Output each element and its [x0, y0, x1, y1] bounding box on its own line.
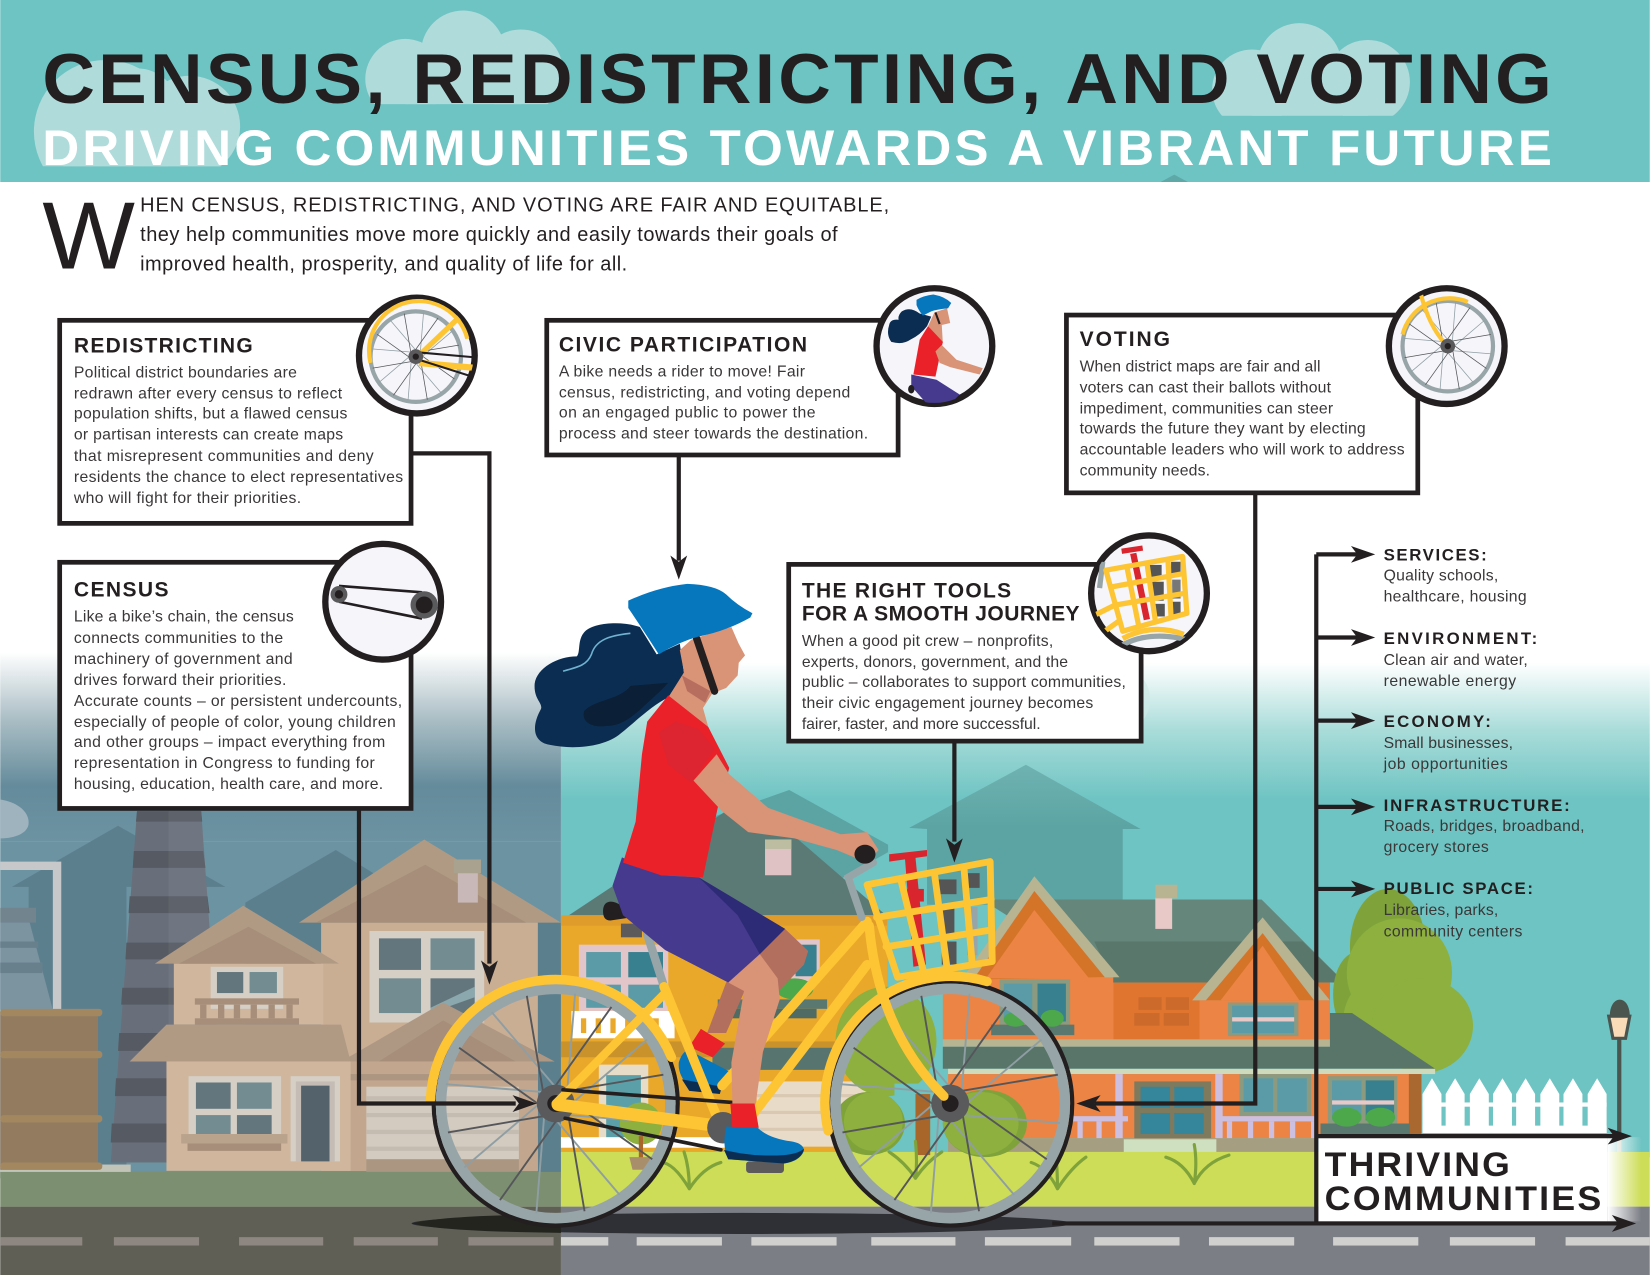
panel: census: machinery of government and	[74, 651, 293, 668]
civic participation connector arrow	[670, 457, 687, 580]
smokestack	[111, 811, 227, 1162]
outcome: public space: PUBLIC SPACE:	[1384, 879, 1533, 898]
panel: the right tools: experts, donors, government, and the	[802, 654, 1068, 671]
hair	[535, 623, 684, 747]
redistricting connector arrow	[412, 453, 498, 985]
outcome: public space: community centers	[1384, 923, 1523, 940]
face and neck	[668, 627, 745, 727]
saddle	[603, 902, 642, 937]
right tools connector arrow	[946, 743, 963, 863]
panel: voting: towards the future they want by electing	[1080, 420, 1366, 437]
intro paragraph with drop cap: improved health, prosperity, and quality of life for all.	[140, 253, 627, 275]
outcome: infrastructure: grocery stores	[1384, 839, 1489, 856]
tan house small	[130, 906, 351, 1171]
panel: redistricting: residents the chance to elect representatives	[74, 469, 403, 486]
panel: census: Like a bike’s chain, the census	[74, 609, 294, 626]
shirt	[623, 695, 729, 877]
thriving communities label box	[1318, 1137, 1641, 1221]
front wheel	[828, 981, 1072, 1226]
outcome: services: SERVICES:	[1384, 546, 1487, 565]
icon: rider	[877, 288, 992, 404]
lawn	[561, 1152, 1650, 1207]
ground left	[0, 1172, 561, 1207]
panel: civic participation: A bike needs a rider to move! Fair	[559, 364, 805, 381]
panel: civic participation: on an engaged public to power the	[559, 405, 816, 422]
helmet strap	[697, 639, 715, 691]
tree right	[1333, 889, 1473, 1073]
panel: the right tools: THE RIGHT TOOLS	[802, 580, 1011, 603]
title: CENSUS, REDISTRICTING, AND VOTING	[42, 39, 1555, 118]
outcome: services: Quality schools,	[1384, 568, 1498, 585]
intro paragraph with drop cap: W	[42, 182, 136, 289]
orange house	[943, 876, 1345, 1047]
panel: voting	[1066, 288, 1505, 493]
panel: redistricting	[60, 298, 479, 523]
subtitle: DRIVING COMMUNITIES TOWARDS A VIBRANT FUTURE	[42, 119, 1555, 176]
panel: voting: community needs.	[1080, 462, 1210, 479]
intro paragraph with drop cap	[42, 182, 889, 289]
panel: census	[60, 544, 441, 808]
basket with tools	[867, 850, 992, 977]
near leg and shoe	[724, 954, 804, 1163]
outcome: services: healthcare, housing	[1384, 589, 1527, 606]
arm	[694, 754, 879, 863]
road right	[561, 1207, 1650, 1275]
cloud left	[0, 800, 29, 838]
panel: the right tools: fairer, faster, and more successful.	[802, 716, 1041, 733]
panel: redistricting: redrawn after every census to reflect	[74, 386, 343, 403]
road left	[0, 1207, 561, 1275]
scene: unfair community (left)	[0, 652, 561, 1275]
panel: civic participation: process and steer towards the destination.	[559, 426, 868, 443]
panel: redistricting: that misrepresent communities and deny	[74, 448, 374, 465]
picket fence	[1423, 1078, 1607, 1133]
panel: voting: When district maps are fair and all	[1080, 358, 1320, 375]
panel: the right tools: their civic engagement journey becomes	[802, 695, 1093, 712]
grass tufts	[661, 1141, 1229, 1189]
panel: the right tools	[789, 535, 1207, 741]
panel: voting: voters can cast their ballots without	[1080, 379, 1332, 396]
panel: civic participation: census, redistricting, and voting depend	[559, 385, 850, 402]
panel: redistricting: Political district boundaries are	[74, 365, 297, 382]
thriving communities label box: THRIVING	[1325, 1146, 1512, 1184]
intro paragraph with drop cap: they help communities move more quickly and easily towards their goals of	[140, 224, 838, 246]
panel: civic participation	[547, 288, 992, 455]
far leg and far shoe	[679, 929, 808, 1094]
panel: census: representation in Congress to funding for	[74, 755, 375, 772]
orange house porch level	[943, 1013, 1435, 1155]
icon: rear wheel	[359, 298, 479, 413]
panel: census: housing, education, health care, and more.	[74, 776, 383, 793]
panel: the right tools: public – collaborates to support communities,	[802, 674, 1126, 691]
icon: chain	[325, 544, 441, 660]
illustration: rider and yellow bicycle	[431, 584, 1072, 1226]
panel: census: connects communities to the	[74, 630, 283, 647]
panel: voting: accountable leaders who will work to address	[1080, 441, 1405, 458]
panel: census: and other groups – impact everything from	[74, 734, 385, 751]
panel: redistricting: who will fight for their priorities.	[73, 490, 301, 507]
panel: civic participation: CIVIC PARTICIPATION	[559, 333, 807, 356]
census connector arrow	[359, 810, 537, 1112]
panel: redistricting: population shifts, but a flawed census	[74, 406, 348, 423]
street lamp	[1603, 1000, 1636, 1174]
tan house large	[299, 839, 561, 1172]
voting connector arrow	[1076, 494, 1255, 1112]
panel: the right tools: FOR A SMOOTH JOURNEY	[802, 603, 1080, 626]
outcome: services	[1316, 546, 1527, 606]
icon: tool basket	[1091, 535, 1207, 651]
faint clouds right	[1112, 673, 1150, 726]
ground shadow under bike	[412, 1213, 1072, 1234]
outcome: economy	[1316, 712, 1513, 773]
helmet	[628, 584, 752, 654]
icon: front wheel	[1389, 288, 1505, 404]
outcome: environment: renewable energy	[1384, 673, 1516, 690]
crank and pedal	[707, 1112, 784, 1173]
shorts	[612, 857, 785, 983]
panel: voting: VOTING	[1080, 328, 1170, 351]
silhouettes left	[12, 826, 561, 1178]
outcome: environment: Clean air and water,	[1384, 652, 1528, 669]
outcome: environment: ENVIRONMENT:	[1384, 629, 1537, 648]
outcome: public space: Libraries, parks,	[1384, 902, 1498, 919]
panel: redistricting: REDISTRICTING	[74, 334, 253, 357]
bike frame	[431, 863, 987, 1150]
outcome: environment	[1316, 629, 1537, 690]
panel: census: Accurate counts – or persistent undercounts,	[74, 693, 402, 710]
header banner	[0, 0, 1650, 182]
outcome: infrastructure	[1316, 796, 1585, 856]
outcome: economy: ECONOMY:	[1384, 712, 1491, 731]
silhouette houses right	[715, 765, 1141, 905]
outcome: infrastructure: INFRASTRUCTURE:	[1384, 796, 1570, 815]
panel: redistricting: or partisan interests can create maps	[74, 427, 343, 444]
outcome: economy: job opportunities	[1383, 756, 1508, 773]
factory pipe and tanks	[0, 866, 131, 1178]
yellow house	[561, 796, 887, 1152]
outcome: economy: Small businesses,	[1384, 735, 1513, 752]
outcome: public space	[1316, 879, 1533, 940]
panel: census: CENSUS	[74, 578, 169, 601]
thriving communities label box: COMMUNITIES	[1325, 1180, 1603, 1218]
panel: census: especially of people of color, young children	[74, 714, 396, 731]
thriving communities arrows	[1052, 554, 1636, 1232]
outcome: infrastructure: Roads, bridges, broadband,	[1384, 818, 1585, 835]
panel: census: drives forward their priorities.	[74, 672, 286, 689]
panel: voting: impediment, communities can steer	[1080, 400, 1333, 417]
bushes and small trees behind bike	[620, 987, 1027, 1170]
panel: the right tools: When a good pit crew – nonprofits,	[802, 633, 1053, 650]
intro paragraph with drop cap: HEN CENSUS, REDISTRICTING, AND VOTING ARE FAIR AND EQUITABLE,	[140, 194, 889, 216]
rear wheel	[434, 981, 678, 1226]
handlebar grip	[854, 845, 875, 864]
scene: thriving community (right)	[561, 663, 1650, 1275]
